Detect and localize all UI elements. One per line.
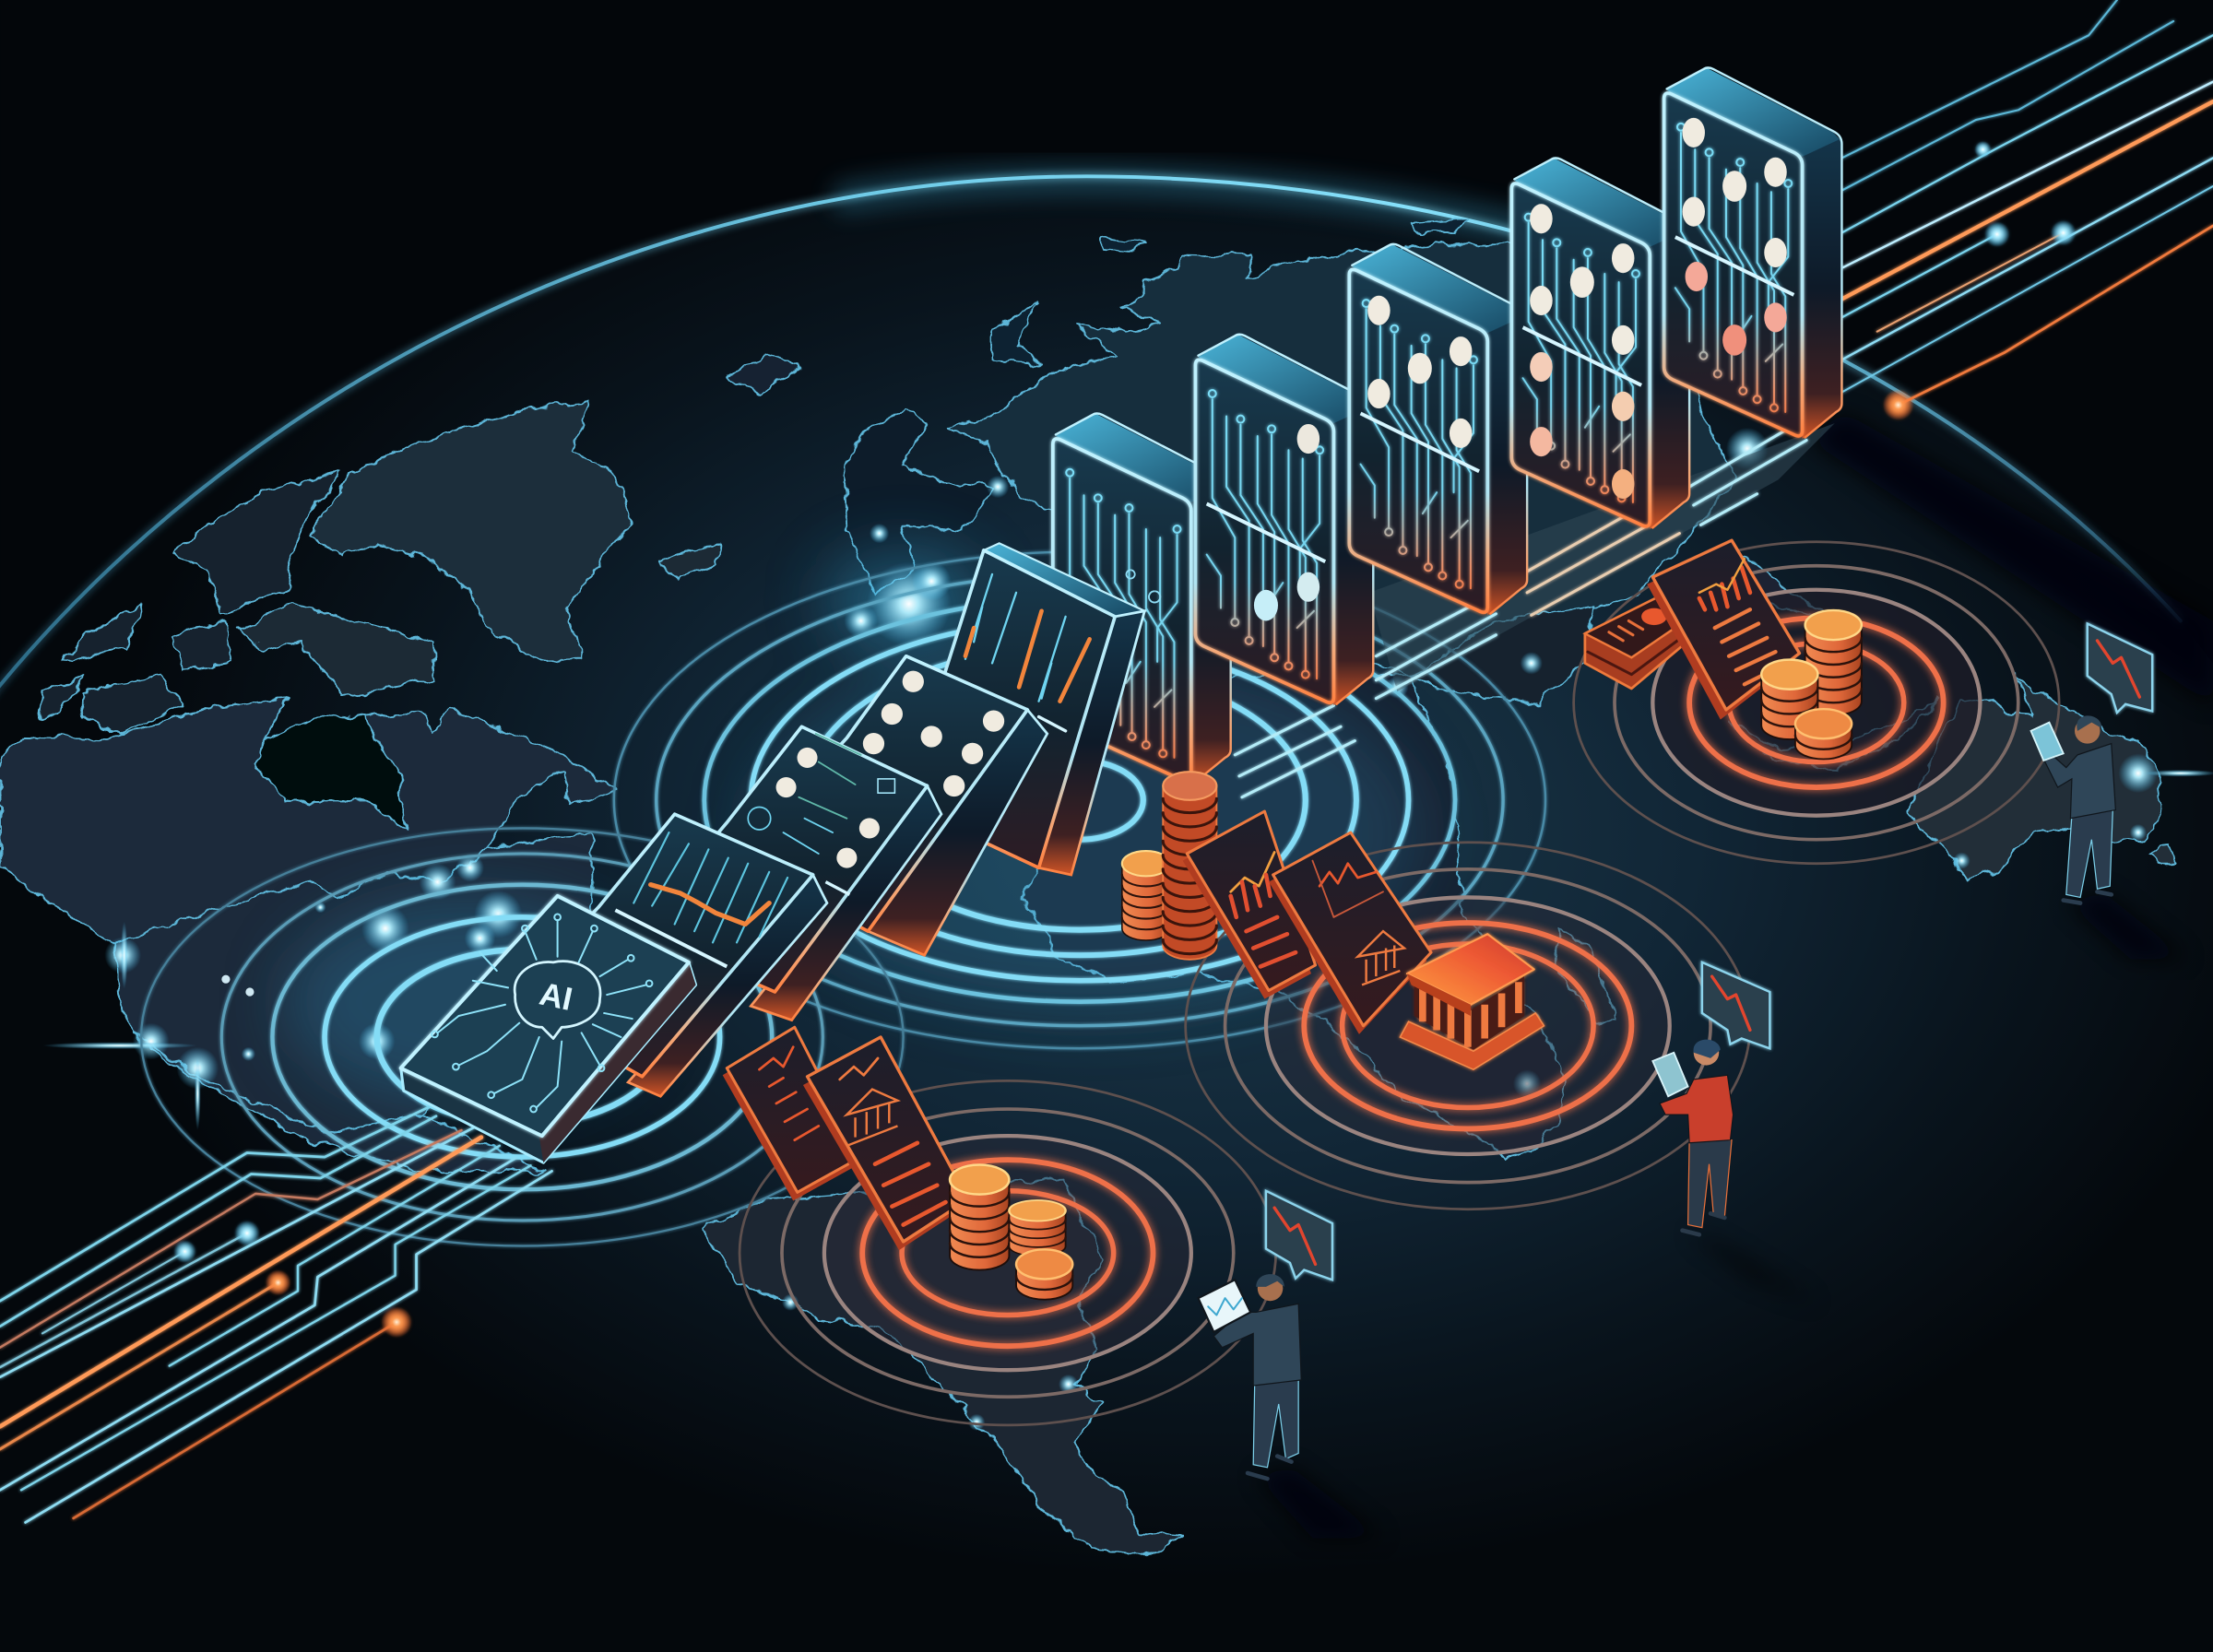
map: Southeast Asia (1412, 607, 1595, 705)
speech bubble (2088, 624, 2152, 713)
circuit traces: lower left input (0, 1108, 551, 1522)
map: Australia (1908, 676, 2163, 879)
falling domino 4: market chart (508, 814, 827, 1096)
orange ripple rings: Asia Pacific (1574, 542, 2059, 864)
domino 3 divider (1207, 503, 1325, 561)
map: Greenland (311, 402, 633, 660)
report card D: South America (803, 1037, 968, 1250)
city lights (42, 428, 2213, 1431)
speech bubble (1702, 962, 1769, 1048)
falling domino 3: dots and notes (635, 726, 941, 1021)
domino 3: standing circuit domino (1195, 335, 1373, 705)
domino 5: standing circuit domino (1511, 158, 1689, 529)
circuit traces: upper right output (1841, 0, 2213, 420)
AI label: AI (537, 976, 575, 1018)
map: Baffin Island (240, 604, 434, 696)
map: United States (112, 832, 593, 1133)
map: Eurasia (947, 242, 1736, 678)
person: analyst with falling chart, Africa (1652, 962, 1820, 1305)
report card C: South America (723, 1027, 861, 1201)
falling domino 5: AI chip (401, 896, 696, 1162)
map: Svalbard (727, 353, 801, 393)
domino 6: standing circuit domino (1664, 67, 1841, 439)
report card E: Asia Pacific (1647, 540, 1800, 720)
falling domino 2: dots (734, 656, 1047, 955)
coin stack short (1122, 851, 1170, 940)
world map (0, 218, 2175, 1555)
speech bubble (1266, 1191, 1332, 1280)
map: Madagascar (1558, 928, 1617, 1023)
falling domino 1: candle chart (904, 543, 1144, 875)
map: Europe (844, 409, 995, 596)
globe rim (0, 176, 2181, 702)
report card A: rising chart (1183, 811, 1316, 999)
light stripes under standing dominoes (1235, 426, 1806, 797)
coin stacks: Europe pile (1122, 772, 1216, 960)
circuit rays (432, 914, 652, 1112)
map: Indonesia (1715, 550, 1941, 769)
blue ripple rings: AI origin (141, 828, 904, 1245)
orange ripple rings: South America (740, 1080, 1276, 1425)
cash stack: Asia Pacific (1585, 598, 1686, 689)
map: Iceland (657, 545, 720, 579)
person: analyst with tablet, Australia (2031, 624, 2187, 960)
report card B: bank chart (1269, 832, 1431, 1034)
orange ripple rings: Africa (1186, 843, 1750, 1210)
map: Hudson Bay (257, 713, 405, 830)
map: North America (0, 699, 617, 1171)
soft blue haze over impact zones (282, 550, 1426, 1108)
coin stack tall (1163, 772, 1216, 960)
map: Victoria Island (40, 604, 233, 734)
map: Africa (1022, 678, 1565, 1160)
AI brain (515, 962, 600, 1039)
domino 4: standing circuit domino (1349, 244, 1527, 615)
coin stacks: Asia Pacific (1761, 610, 1862, 759)
person: analyst with tablet, South America (1198, 1191, 1383, 1538)
domino shadows and ground band (1369, 412, 2213, 705)
bank building (1400, 934, 1544, 1069)
map: Arctic archipelago (173, 474, 338, 614)
coin stacks: South America (950, 1164, 1072, 1300)
map: South America (702, 1180, 1186, 1555)
globe inner glow (846, 180, 1665, 268)
domino 2: standing circuit domino (1053, 413, 1231, 785)
map: Tasmania (2148, 846, 2175, 864)
blue ripple rings: Europe impact (614, 551, 1545, 1048)
map: Novaya Zemlya (992, 218, 1468, 364)
